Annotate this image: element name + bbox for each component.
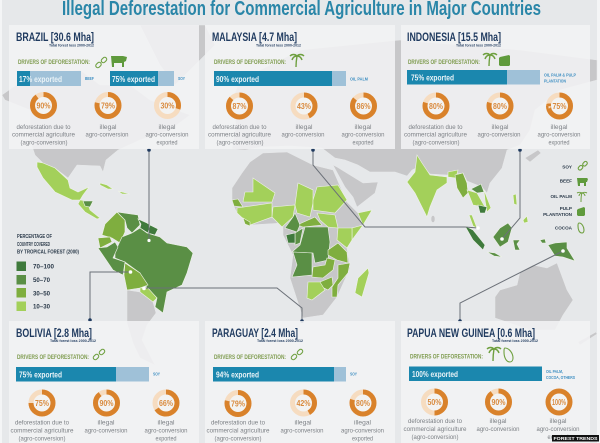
donut: 80% illegal bbox=[478, 95, 521, 138]
donut: 90% deforestation: 90% bbox=[36, 102, 50, 110]
label: oil palm, cocoa, others: OIL PALM, bbox=[546, 369, 563, 374]
donut: 100% exported: agro-conversion bbox=[536, 426, 580, 433]
donut: 75% exported bbox=[538, 95, 581, 146]
icon: oil palm bbox=[290, 54, 304, 67]
tropical forest countries: Africa bbox=[232, 178, 372, 300]
connector: Indonesia bbox=[500, 148, 522, 241]
donut: 86% exported: exported bbox=[352, 140, 374, 146]
donut: 75% exported: exported bbox=[548, 140, 570, 146]
icon: soy bbox=[95, 56, 108, 69]
bar: soy exported: 75% exported bbox=[112, 74, 155, 84]
heading: Indonesia: INDONESIA [15.5 Mha] bbox=[407, 30, 501, 44]
donut: 50% deforestation: 50% bbox=[428, 398, 442, 407]
donut: 80% exported bbox=[341, 392, 384, 442]
legend: percentage of forest cover: BY TROPICAL FOREST (2000) bbox=[17, 250, 79, 256]
note: forest loss: Total forest loss 2000-2012 bbox=[49, 44, 94, 48]
donut: 75% exported: illegal bbox=[550, 124, 568, 131]
panel: Brazil bbox=[9, 25, 199, 149]
donut: 86% exported: 86% bbox=[356, 102, 370, 111]
donut: 90% illegal bbox=[84, 392, 128, 434]
donut: 75% exported: agro-conversion bbox=[538, 132, 581, 138]
donut: 90% illegal bbox=[476, 391, 520, 433]
donut: 80% illegal: 80% bbox=[493, 102, 507, 111]
connector: Brazil bbox=[147, 148, 151, 242]
panel: Papua New Guinea bbox=[401, 321, 590, 443]
donut: 79% deforestation: commercial agriculture bbox=[206, 428, 270, 434]
donut: 79% deforestation: (agro-conversion) bbox=[214, 436, 262, 442]
donut: 66% exported: exported bbox=[156, 436, 177, 442]
donut: 80% exported: 80% bbox=[356, 399, 370, 408]
legend: percentage of forest cover: 30–50 bbox=[33, 290, 50, 298]
label: oil palm and pulp plantation: PLANTATION bbox=[544, 78, 566, 84]
legend: drivers: PULP bbox=[560, 206, 572, 211]
donut: 90% deforestation bbox=[12, 94, 75, 146]
legend: percentage of forest cover bbox=[16, 234, 79, 311]
world map bbox=[2, 25, 597, 365]
donut: 79% illegal: illegal bbox=[100, 124, 117, 131]
donut: 42% illegal bbox=[280, 392, 324, 434]
donut: 80% deforestation: 80% bbox=[429, 102, 443, 111]
legend: drivers: COCOA bbox=[555, 226, 573, 230]
legend: percentage of forest cover: 10–30 bbox=[33, 304, 50, 310]
donut: 75% deforestation: deforestation due to bbox=[15, 420, 69, 426]
credit: Forest Trends bbox=[552, 435, 599, 442]
bar: oil palm exported: 90% exported bbox=[216, 74, 259, 84]
donut: 43% illegal: agro-conversion bbox=[282, 132, 325, 138]
donut: 80% exported: illegal bbox=[354, 420, 372, 426]
bar: exported: 100% exported bbox=[412, 369, 458, 379]
icon: cocoa bbox=[504, 348, 513, 362]
donut: 90% illegal: agro-conversion bbox=[476, 426, 520, 433]
legend: drivers: OIL PALM bbox=[550, 194, 572, 199]
connector: Papua New Guinea bbox=[458, 249, 565, 323]
donut: 90% deforestation: (agro-conversion) bbox=[20, 140, 68, 146]
label: soy: SOY bbox=[350, 372, 357, 376]
donut: 43% illegal: illegal bbox=[296, 124, 313, 131]
note: forest loss: Total forest loss 2000-2012 bbox=[256, 44, 301, 48]
note: forest loss: Total forest loss 2000-2012 bbox=[456, 44, 501, 48]
land: Australia bbox=[495, 263, 573, 330]
legend: percentage of forest cover: 50–70 bbox=[33, 277, 50, 284]
donut: 86% exported: illegal bbox=[354, 124, 372, 131]
donut: 66% exported: illegal bbox=[158, 420, 175, 426]
label: oil palm: OIL PALM bbox=[350, 76, 368, 82]
legend: drivers bbox=[543, 161, 588, 233]
bar: oil palm and pulp exported: 75% exported bbox=[411, 72, 454, 82]
donut: 66% exported: 66% bbox=[159, 399, 173, 408]
donut: 75% deforestation: commercial agriculture bbox=[10, 428, 74, 434]
legend: drivers: SOY bbox=[562, 164, 572, 170]
donut: 80% illegal: illegal bbox=[492, 124, 509, 131]
donut: 90% illegal: agro-conversion bbox=[84, 428, 128, 434]
donut: 100% exported: illegal bbox=[550, 418, 567, 425]
donut: 75% exported: 75% bbox=[552, 102, 566, 111]
donut: 79% deforestation: deforestation due to bbox=[211, 420, 265, 426]
donut: 87% deforestation: (agro-conversion) bbox=[216, 140, 264, 146]
donut: 79% illegal: agro-conversion bbox=[86, 132, 129, 138]
land: Africa bbox=[232, 152, 372, 318]
drivers label: DRIVERS OF DEFORESTATION: bbox=[18, 60, 90, 66]
donut: 79% deforestation: 79% bbox=[231, 400, 245, 408]
donut: 50% deforestation: commercial agriculture bbox=[404, 426, 467, 433]
connector: Paraguay bbox=[142, 287, 304, 323]
icon: pulp plantation bbox=[499, 55, 510, 66]
donut: 30% exported bbox=[146, 94, 189, 146]
heading: Paraguay: PARAGUAY [2.4 Mha] bbox=[212, 326, 298, 340]
donut: 50% deforestation: deforestation due to bbox=[408, 418, 462, 425]
donut: 86% exported bbox=[342, 95, 385, 146]
donut: 100% exported: 100% bbox=[552, 398, 566, 407]
legend: drivers: BEEF bbox=[560, 178, 572, 184]
donut: 30% exported: agro-conversion bbox=[146, 132, 189, 138]
donut: 79% deforestation bbox=[206, 392, 270, 442]
drivers label: DRIVERS OF DEFORESTATION: bbox=[410, 354, 483, 360]
donut: 87% deforestation: 87% bbox=[232, 102, 246, 111]
heading: Papua New Guinea: PAPUA NEW GUINEA [0.6 Mha] bbox=[407, 326, 535, 340]
bar: oil palm and pulp exported bbox=[407, 70, 540, 84]
icon: oil palm bbox=[487, 348, 501, 361]
bar: soy exported bbox=[16, 367, 149, 382]
land: Sri Lanka bbox=[431, 216, 435, 222]
connector: Malaysia bbox=[311, 148, 480, 230]
donut: 66% exported bbox=[144, 392, 188, 442]
legend: percentage of forest cover: PERCENTAGE OF bbox=[17, 234, 52, 240]
icon: soy bbox=[290, 348, 304, 361]
label: oil palm, cocoa, others bbox=[546, 369, 575, 380]
donut: 87% deforestation: commercial agriculture bbox=[208, 132, 271, 138]
donut: 90% illegal: 90% bbox=[492, 398, 506, 407]
donut: 80% deforestation: (agro-conversion) bbox=[412, 140, 460, 146]
heading: Brazil: BRAZIL [30.6 Mha] bbox=[16, 30, 94, 44]
donut: 90% illegal: 90% bbox=[100, 399, 114, 408]
bar: oil palm exported bbox=[214, 71, 346, 86]
land: Greenland bbox=[140, 25, 215, 85]
donut: 80% illegal: agro-conversion bbox=[478, 132, 521, 138]
donut: 90% deforestation: deforestation due to bbox=[16, 124, 71, 131]
tropical forest countries: Asia and Pacific bbox=[407, 155, 575, 261]
donut: 80% deforestation: deforestation due to bbox=[408, 124, 463, 131]
heading: Malaysia: MALAYSIA [4.7 Mha] bbox=[212, 30, 297, 44]
donut: 87% deforestation bbox=[208, 95, 271, 146]
label: beef: BEEF bbox=[85, 76, 94, 81]
land: southern South America bbox=[127, 290, 156, 365]
donut: 42% illegal: agro-conversion bbox=[280, 428, 324, 434]
land: Eurasia bbox=[232, 40, 597, 193]
drivers label: DRIVERS OF DEFORESTATION: bbox=[17, 355, 89, 361]
bar: beef exported bbox=[17, 71, 81, 86]
donut: 90% illegal: illegal bbox=[490, 418, 507, 425]
label: soy: SOY bbox=[178, 76, 185, 81]
icon: beef bbox=[111, 56, 127, 67]
connector: Bolivia bbox=[88, 270, 132, 322]
donut: 90% illegal: illegal bbox=[98, 420, 115, 426]
tropical forest countries: Americas bbox=[37, 162, 193, 313]
bar: soy exported bbox=[110, 71, 174, 86]
donut: 50% deforestation bbox=[404, 391, 467, 441]
bar: beef exported: 17% exported bbox=[19, 74, 62, 84]
donut: 80% deforestation: commercial agriculture bbox=[404, 132, 467, 138]
donut: 42% illegal: 42% bbox=[296, 399, 310, 408]
bar: soy exported: 94% exported bbox=[216, 370, 259, 380]
bar: exported bbox=[409, 366, 542, 381]
drivers label: DRIVERS OF DEFORESTATION: bbox=[408, 60, 480, 66]
donut: 43% illegal bbox=[282, 95, 325, 138]
donut: 79% illegal bbox=[86, 94, 129, 138]
donut: 87% deforestation: deforestation due to bbox=[212, 124, 267, 131]
donut: 80% deforestation bbox=[404, 95, 467, 146]
donut: 80% exported: exported bbox=[352, 436, 373, 442]
note: forest loss: Total forest loss 2000-2012 bbox=[492, 339, 538, 343]
drivers label: DRIVERS OF DEFORESTATION: bbox=[214, 355, 286, 361]
land: Japan bbox=[525, 150, 541, 162]
donut: 75% deforestation: (agro-conversion) bbox=[18, 436, 66, 442]
label: oil palm, cocoa, others: COCOA, OTHERS bbox=[546, 375, 575, 380]
note: forest loss: Total forest loss 2000-2012 bbox=[257, 339, 303, 343]
donut: 75% deforestation bbox=[10, 392, 74, 442]
donut: 80% exported: agro-conversion bbox=[341, 428, 384, 434]
land: North America bbox=[2, 70, 190, 178]
label: soy: SOY bbox=[153, 372, 160, 376]
donut: 100% exported: exported bbox=[548, 434, 569, 441]
donut: 75% deforestation: 75% bbox=[35, 399, 49, 408]
donut: 79% illegal: 79% bbox=[101, 102, 115, 110]
panel: Bolivia bbox=[9, 321, 199, 443]
icon: oil palm bbox=[483, 54, 497, 66]
label: oil palm and pulp plantation: OIL PALM & PULP bbox=[544, 72, 576, 78]
heading: Bolivia: BOLIVIA [2.8 Mha] bbox=[16, 326, 92, 340]
credit: Forest Trends: FOREST TRENDS bbox=[554, 436, 598, 442]
donut: 43% illegal: 43% bbox=[297, 102, 311, 111]
donut: 66% exported: agro-conversion bbox=[144, 428, 188, 434]
legend: drivers: PLANTATION bbox=[543, 212, 573, 217]
donut: 30% exported: exported bbox=[156, 140, 178, 146]
label: oil palm and pulp plantation bbox=[544, 72, 576, 84]
icon: soy bbox=[92, 348, 106, 361]
land: New Zealand bbox=[578, 332, 597, 345]
donut: 30% exported: illegal bbox=[158, 124, 176, 131]
panel: Indonesia bbox=[401, 25, 590, 149]
panel: Paraguay bbox=[205, 321, 395, 443]
donut: 42% illegal: illegal bbox=[294, 420, 312, 426]
drivers label: DRIVERS OF DEFORESTATION: bbox=[214, 60, 286, 66]
legend: percentage of forest cover: COUNTRY COVERED bbox=[17, 242, 50, 248]
donut: 86% exported: agro-conversion bbox=[342, 132, 385, 138]
bar: soy exported bbox=[213, 367, 346, 382]
legend: percentage of forest cover: 70–100 bbox=[33, 264, 54, 270]
panel: Malaysia bbox=[205, 25, 395, 149]
donut: 90% deforestation: commercial agriculture bbox=[12, 132, 75, 138]
bar: soy exported: 75% exported bbox=[19, 370, 62, 380]
land: Arabia bbox=[333, 165, 378, 207]
donut: 50% deforestation: (agro-conversion) bbox=[412, 434, 458, 441]
donut: 100% exported bbox=[536, 391, 580, 441]
donut: 30% exported: 30% bbox=[160, 102, 174, 110]
note: forest loss: Total forest loss 2000-2012 bbox=[50, 339, 96, 343]
